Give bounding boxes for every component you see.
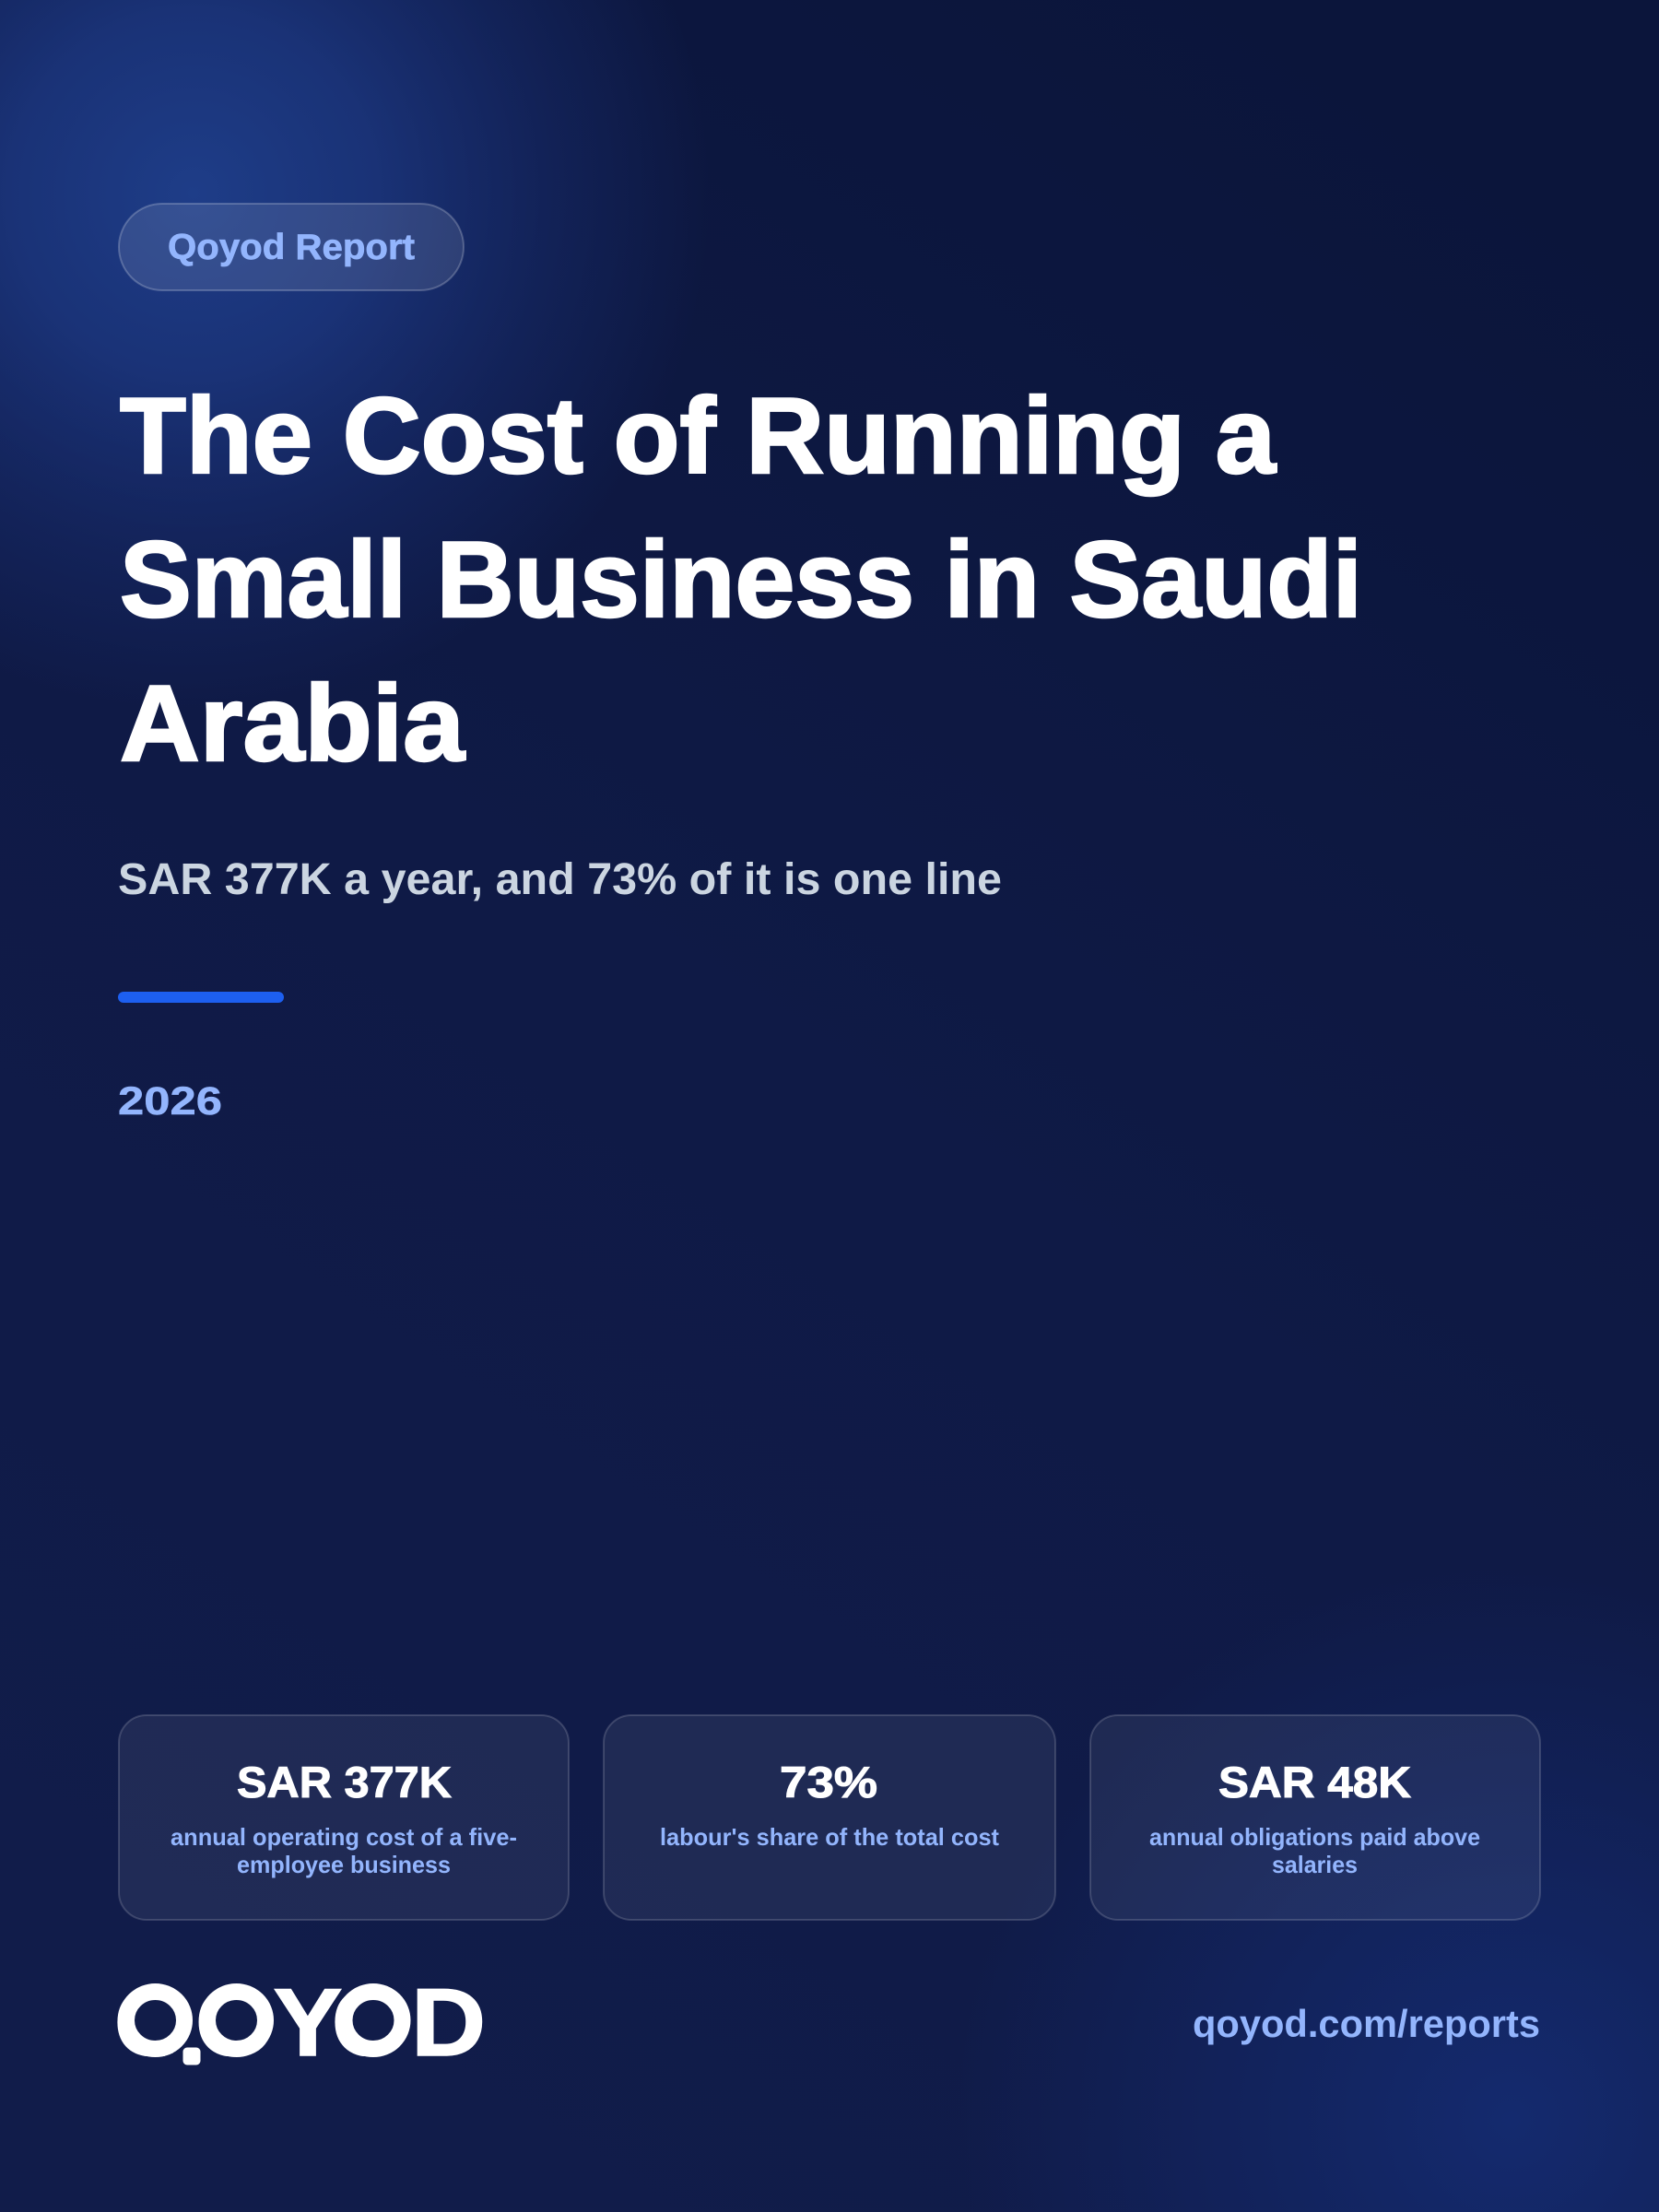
stat card: labour share — [604, 1715, 1055, 1920]
title — [120, 375, 1362, 783]
badge: Qoyod Report — [119, 204, 464, 290]
stat card: annual operating cost: annual operating cost of a five- — [171, 1823, 517, 1851]
accent rule — [118, 992, 284, 1003]
badge: Qoyod Report: Qoyod Report — [168, 228, 415, 267]
stat card: annual operating cost: employee business — [237, 1851, 451, 1878]
stat card: annual obligations: annual obligations paid above — [1149, 1823, 1480, 1851]
logo: QOYOD wordmark: QOYOD — [114, 1969, 486, 2076]
title: Arabia — [120, 663, 465, 783]
stat card: annual operating cost — [119, 1715, 569, 1920]
website url: qoyod.com/reports — [1193, 2002, 1540, 2045]
stat card: labour share: 73% — [780, 1758, 877, 1806]
stat card: annual obligations — [1090, 1715, 1540, 1920]
stat card: annual obligations: SAR 48K — [1218, 1758, 1411, 1806]
title: The Cost of Running a — [120, 375, 1277, 496]
stat card: annual obligations: salaries — [1272, 1851, 1358, 1878]
stat card: labour share: labour's share of the total cost — [660, 1823, 999, 1851]
subtitle: SAR 377K a year, and 73% of it is one line — [118, 855, 1002, 904]
year: 2026 — [118, 1079, 222, 1124]
title: Small Business in Saudi — [120, 519, 1362, 640]
stat card: annual operating cost: SAR 377K — [237, 1758, 452, 1806]
